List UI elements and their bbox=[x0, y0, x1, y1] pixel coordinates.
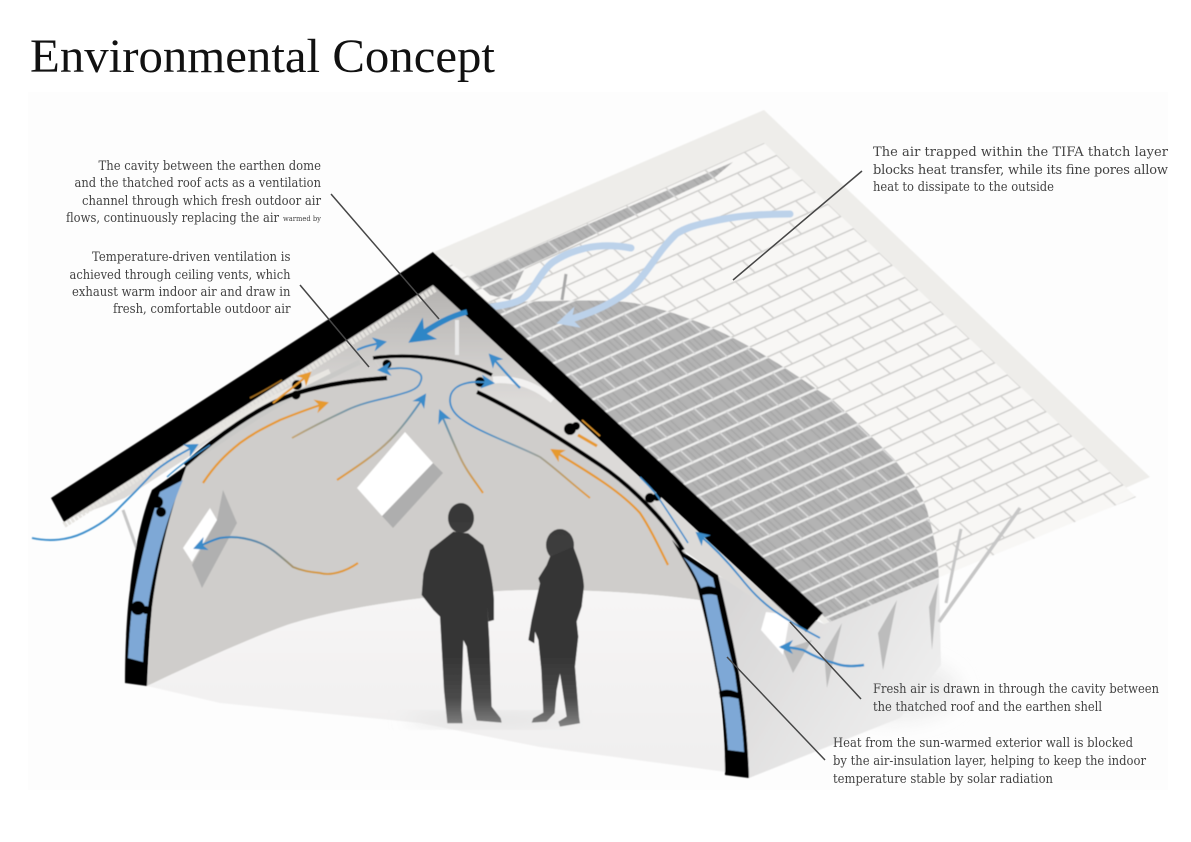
text: air insulation: Heat from the sun-warmed exterior wall is blocked bbox=[833, 736, 1133, 751]
text: ceiling vents bbox=[70, 250, 291, 317]
dark blue cavity arrow bbox=[420, 312, 467, 335]
text: ceiling vents: fresh, comfortable outdoor air bbox=[113, 302, 291, 317]
people shadow bbox=[405, 714, 575, 726]
text: ceiling vents: Temperature-driven ventilation is bbox=[92, 250, 290, 265]
text: TIFA thatch layer: blocks heat transfer, while its fine pores allow bbox=[873, 163, 1168, 178]
text: cavity ventilation: and the thatched roof acts as a ventilation bbox=[74, 176, 322, 191]
text: cavity ventilation bbox=[66, 159, 322, 226]
person: woman bbox=[528, 529, 584, 727]
text: ceiling vents: achieved through ceiling vents, which bbox=[70, 268, 291, 283]
panel: illustration background bbox=[28, 92, 1168, 790]
text: air insulation bbox=[833, 736, 1147, 787]
right arch with air insulation bbox=[672, 540, 749, 778]
text: cavity ventilation: channel through which fresh outdoor air bbox=[82, 194, 322, 209]
shaded thatch near the ridge bbox=[468, 162, 733, 300]
text: TIFA thatch layer: heat to dissipate to the outside bbox=[873, 180, 1054, 195]
window: left bbox=[183, 490, 237, 588]
leader lines bbox=[300, 171, 862, 760]
person: man bbox=[422, 503, 502, 723]
blue ventilation arrows bbox=[32, 342, 864, 666]
text: fresh air bbox=[873, 682, 1160, 715]
black roof bands bbox=[51, 252, 823, 632]
floor bbox=[147, 590, 726, 772]
ground shadow bbox=[830, 658, 960, 722]
text: cavity ventilation: warmed by bbox=[283, 215, 321, 223]
thatched roof plane bbox=[434, 110, 1150, 630]
right window bbox=[761, 612, 790, 655]
thatch grid bbox=[434, 143, 1136, 622]
text: fresh air: the thatched roof and the earthen shell bbox=[873, 700, 1102, 715]
text: air insulation: by the air-insulation layer, helping to keep the indoor bbox=[833, 754, 1147, 769]
text: air insulation: temperature stable by solar radiation bbox=[833, 772, 1054, 787]
left arch with air insulation bbox=[125, 465, 187, 686]
exterior wall bbox=[705, 570, 941, 778]
text: ceiling vents: exhaust warm indoor air and draw in bbox=[72, 285, 291, 300]
roof cavity bbox=[64, 285, 803, 630]
shell joints bbox=[292, 360, 661, 503]
dome seen through the thatch bbox=[480, 301, 939, 630]
earthen shell and ceiling vent bbox=[185, 356, 683, 550]
text: fresh air: Fresh air is drawn in through the cavity between bbox=[873, 682, 1160, 697]
text: TIFA thatch layer bbox=[873, 145, 1169, 195]
title: Environmental Concept bbox=[30, 30, 496, 83]
illustration: section through the dome bbox=[32, 110, 1150, 778]
interior wall bbox=[147, 356, 712, 686]
window: centre bbox=[357, 432, 443, 528]
text: cavity ventilation: flows, continuously replacing the air bbox=[66, 211, 280, 226]
orange warm-air arrows bbox=[203, 373, 668, 565]
text: TIFA thatch layer: The air trapped within the TIFA thatch layer bbox=[873, 145, 1169, 160]
supports bbox=[123, 274, 1020, 622]
text: cavity ventilation: The cavity between the earthen dome bbox=[98, 159, 321, 174]
light blue airflow above the thatch bbox=[480, 214, 790, 320]
